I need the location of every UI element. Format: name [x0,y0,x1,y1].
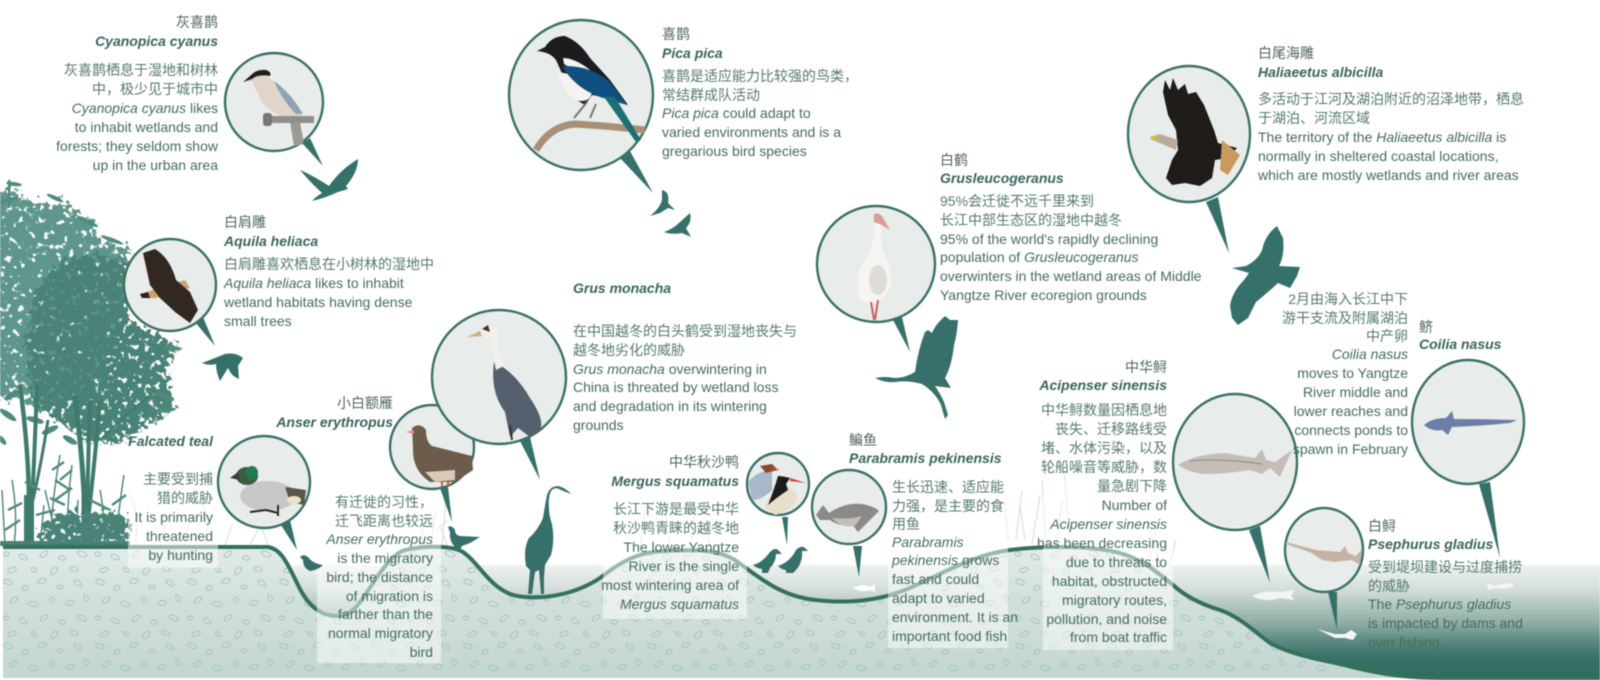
description: River is the single [628,558,739,574]
description: 常结群成队活动 [662,87,760,103]
pointer [893,317,910,352]
heading [1368,518,1493,552]
description: Aquila heliaca likes to inhabit [223,275,404,291]
pointer [782,517,788,545]
heading: 喜鹊 [662,26,690,42]
heading: 小白额雁 [337,395,393,411]
description: environment. It is an [892,609,1018,625]
description: threatened [146,528,213,544]
description: 迁飞距离也较远 [335,513,433,529]
panel: Pica pica [509,20,858,237]
description: Anser erythropus [325,531,433,547]
pointer [302,138,323,166]
panel: Haliaeetus albicilla [1128,45,1524,325]
panel: Anser erythropus [275,395,480,660]
heading [662,26,723,61]
pointer [1249,526,1270,583]
panel: Grus leucogeranus [817,152,1202,419]
photo: Siberian crane [817,206,935,322]
crane silhouette [525,486,571,594]
pointer [1328,592,1337,630]
description [56,62,219,173]
heading: Cyanopica cyanus [95,33,218,49]
description: The lower Yangtze [624,539,739,555]
description: spawn in February [1293,441,1408,457]
heading: 白尾海雕 [1258,45,1314,61]
heading [611,454,739,489]
heading: Anser erythropus [275,414,393,430]
description: 受到堤坝建设与过度捕捞 [1368,559,1522,575]
bird silhouette [300,159,358,201]
description: farther than the [338,606,433,622]
illustration: trees and reeds [0,180,1176,570]
description: pollution, and noise [1046,611,1167,627]
description [134,471,213,563]
description: 轮船噪音等威胁，数 [1041,459,1167,475]
description: 秋沙鸭青睐的越冬地 [613,520,739,536]
description: grounds [573,417,624,433]
description: 有迁徙的习性， [335,494,433,510]
description [223,256,434,329]
pointer [1479,482,1500,558]
heading: 鲚 [1419,319,1433,335]
photo: eagle [124,239,216,331]
description: 的威胁 [1368,578,1410,594]
description: over fishing. [1368,634,1443,650]
description: small trees [224,313,292,329]
description: fast and could [892,571,979,587]
faint reeds [128,470,1176,570]
description: Coilia nasus [1332,346,1408,362]
heading: 灰喜鹊 [176,14,218,30]
description: forests; they seldom show [56,138,219,154]
photo: mergansers [747,453,809,515]
heading [275,395,393,430]
description: Pica pica could adapt to [662,105,811,121]
heading [1038,359,1167,393]
description: population of Grusleucogeranus [940,249,1138,265]
description: moves to Yangtze [1297,365,1408,381]
description: 在中国越冬的白头鹤受到湿地丧失与 [573,323,797,339]
white fish [1252,590,1295,600]
description [601,501,739,612]
description: 中华鲟数量因栖息地 [1041,402,1167,418]
pointer [1206,197,1229,253]
description: 95% of the world's rapidly declining [940,231,1158,247]
bird silhouettes [650,190,691,237]
description: varied environments and is a [662,124,841,140]
text backing panels [128,480,1173,663]
heading: Pica pica [662,45,723,61]
reeds [2,455,126,545]
panel: Psephurus gladius [1285,508,1523,650]
heading [940,152,1064,186]
description: is the migratory [337,550,433,566]
description: 堵、水体污染，以及 [1041,440,1167,456]
white fish [1487,583,1515,590]
photo: azure-winged magpie [225,53,323,151]
description [662,68,858,159]
description: 猎的威胁 [157,490,213,506]
heading [223,214,318,249]
description: 用鱼 [892,516,920,532]
description: has been decreasing [1037,535,1167,551]
description: to inhabit wetlands and [75,119,218,135]
description: The Psephurus gladius [1368,596,1511,612]
description: habitat, obstructed [1052,573,1167,589]
description: overwinters in the wetland areas of Middle [940,268,1202,284]
description: is impacted by dams and [1368,615,1523,631]
duck silhouette [300,555,323,571]
description [1037,402,1167,645]
photo: white-tailed eagle [1128,66,1250,202]
description: 力强，是主要的食 [892,498,1004,514]
photo: sturgeon [1173,394,1297,530]
heading: Grusleucogeranus [940,170,1064,186]
panel: Acipenser sinensis [1037,359,1297,645]
white fish [853,584,875,592]
pointer [281,520,297,550]
description: most wintering area of [601,577,739,593]
panel: Falcated teal [128,433,323,571]
pointer [853,546,862,577]
description: 2月由海入长江中下 [1288,291,1408,307]
photo: bream [812,470,886,544]
description: adapt to varied [892,590,985,606]
eagle silhouette [1230,226,1300,325]
description: lower reaches and [1294,403,1408,419]
description: 生长迅速、适应能 [892,479,1004,495]
description: 中产卵 [1366,328,1408,344]
description: 95%会迁徙不远千里来到 [940,193,1094,209]
crane silhouette [875,316,958,419]
panel: Grus monacha [432,280,797,594]
description: gregarious bird species [662,143,807,159]
heading: Psephurus gladius [1368,536,1493,552]
heading: Acipenser sinensis [1038,377,1167,393]
pointer [440,487,452,522]
pointer [195,317,215,346]
description: It is primarily [134,509,213,525]
photo: teal [218,436,310,528]
description: bird [410,644,433,660]
description: normally in sheltered coastal locations, [1258,148,1498,164]
heading [1258,45,1383,80]
ground profile with pebbles [3,547,1600,678]
description: Number of [1102,497,1167,513]
description: 喜鹊是适应能力比较强的鸟类， [662,68,858,84]
description: and degradation in its wintering [573,398,767,414]
heading: Grus monacha [573,280,671,296]
description: 长江下游是最受中华 [613,501,739,517]
description: 中，极少见于城市中 [92,81,218,97]
photo: goose [390,405,474,489]
description: 越冬地劣化的威胁 [573,342,685,358]
description: 于湖泊、河流区域 [1258,110,1370,126]
description [1368,559,1523,650]
description: 白肩雕喜欢栖息在小树林的湿地中 [224,256,434,272]
description: of migration is [346,588,433,604]
description: by hunting [148,547,213,563]
pointer [520,437,540,480]
description: important food fish [892,628,1007,644]
description: China is threated by wetland loss [573,379,778,395]
heading: 白鲟 [1368,518,1396,534]
panel: Mergus squamatus [601,453,809,612]
description: due to threats to [1066,554,1167,570]
heading: Parabramis pekinensis [849,450,1002,466]
pointer [620,151,653,193]
description: River middle and [1303,384,1408,400]
description: Grus monacha overwintering in [573,361,767,377]
panel: Cyanopica cyanus [56,14,358,201]
photo: hooded crane [432,310,566,444]
panel: Coilia nasus [1282,291,1524,590]
description [891,479,1018,644]
tree trunks [20,385,150,546]
description [325,494,433,660]
description [1282,291,1408,457]
heading: Aquila heliaca [223,233,318,249]
riverbed line [3,547,1600,678]
goose silhouette [448,526,480,550]
description: Yangtze River ecoregion grounds [940,287,1147,303]
description: Acipenser sinensis [1049,516,1167,532]
description: from boat traffic [1070,629,1167,645]
tree foliage [0,180,182,447]
heading: 鳊鱼 [849,432,877,448]
description: Cyanopica cyanus likes [72,100,218,116]
heading [1419,319,1502,352]
photo: magpie [509,20,653,170]
description [1257,91,1524,183]
description: pekinensis grows [891,552,999,568]
description: 丧失、迁移路线受 [1055,421,1167,437]
photo: anchovy [1412,360,1524,484]
white fish [1317,629,1357,640]
description [940,193,1202,303]
heading: Mergus squamatus [611,473,739,489]
description [573,323,797,433]
heading: Haliaeetus albicilla [1258,64,1383,80]
description: 游干支流及附属湖泊 [1282,310,1408,326]
description: Mergus squamatus [620,596,739,612]
heading: 中华鲟 [1125,359,1167,375]
bird silhouette [202,354,243,381]
description: 主要受到捕 [143,471,213,487]
description: 量急剧下降 [1097,478,1167,494]
duck silhouettes [753,547,808,573]
heading [849,432,1002,466]
description: 长江中部生态区的湿地中越冬 [940,212,1122,228]
description: wetland habitats having dense [223,294,413,310]
description: connects ponds to [1294,422,1408,438]
heading: Coilia nasus [1419,336,1502,352]
description: migratory routes, [1062,592,1167,608]
panel: Parabramis pekinensis [812,432,1018,644]
heading: 白肩雕 [224,214,266,230]
heading: 中华秋沙鸭 [669,454,739,470]
panel: Aquila heliaca [124,214,434,381]
heading: 白鹤 [940,152,968,168]
description: bird; the distance [326,569,433,585]
heading [95,14,218,49]
description: Parabramis [892,534,964,550]
description: up in the urban area [93,157,218,173]
description: 灰喜鹊栖息于湿地和树林 [64,62,218,78]
description: normal migratory [328,625,433,641]
heading: Falcated teal [128,433,214,449]
description: which are mostly wetlands and river areas [1257,167,1519,183]
description: The territory of the Haliaeetus albicilla is [1258,129,1506,145]
photo: paddlefish [1285,508,1363,592]
description: 多活动于江河及湖泊附近的沼泽地带，栖息 [1258,91,1524,107]
water gradient [3,565,1600,678]
